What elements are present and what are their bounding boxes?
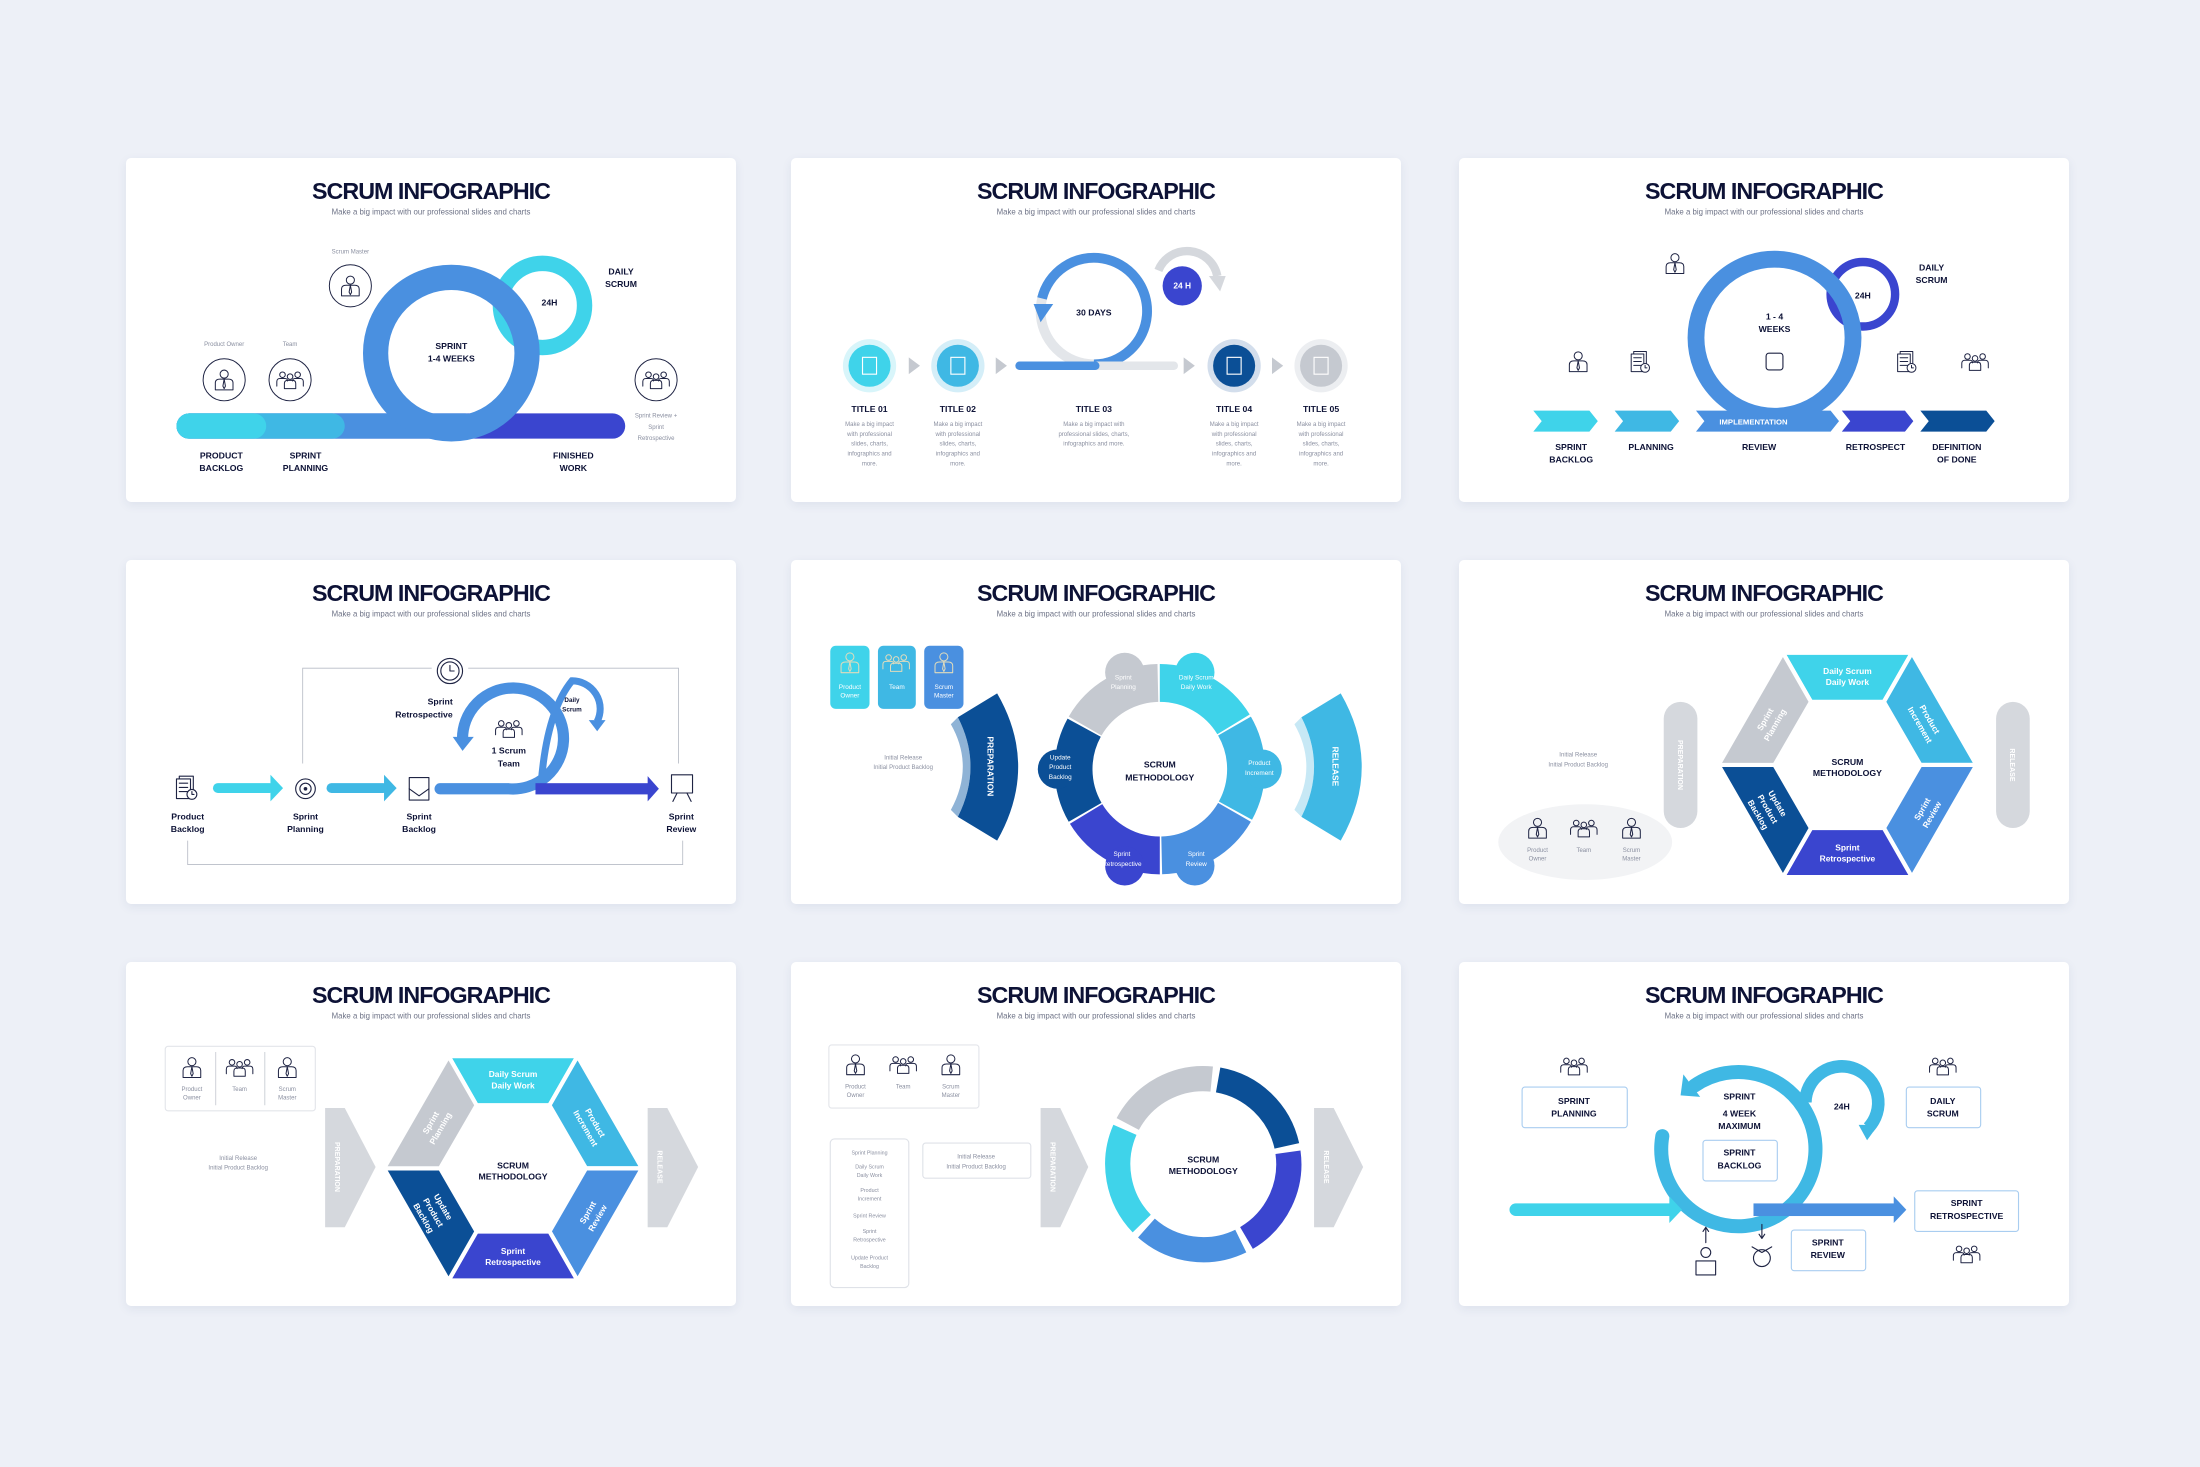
step texts: more. xyxy=(1313,461,1329,467)
30 days loop: 30 DAYS xyxy=(1076,307,1112,317)
icon: scrum master: Scrum Master xyxy=(332,250,369,256)
step icons xyxy=(176,775,693,801)
title: SCRUM INFOGRAPHIC xyxy=(1645,580,1884,606)
step texts: TITLE 04 xyxy=(1216,404,1252,414)
title: SCRUM INFOGRAPHIC xyxy=(312,178,551,204)
roles box: Owner xyxy=(847,1093,864,1099)
sprint ring: 1 - 4 xyxy=(1766,311,1783,321)
hex labels: Daily Scrum xyxy=(1823,666,1872,676)
bottom labels: WORK xyxy=(560,463,588,473)
cyan arrows xyxy=(213,775,397,801)
loop: Daily xyxy=(564,697,580,704)
title: SCRUM INFOGRAPHIC xyxy=(977,982,1216,1008)
title: SCRUM INFOGRAPHIC xyxy=(977,178,1216,204)
roles ellipse: Owner xyxy=(1529,856,1546,862)
bottom labels: FINISHED xyxy=(553,450,594,460)
list box: Sprint Review xyxy=(853,1213,886,1219)
role boxes: Team xyxy=(889,684,905,691)
chevrons: IMPLEMENTATION xyxy=(1719,418,1788,427)
initial release: Initial Release xyxy=(219,1156,258,1162)
sprint loop xyxy=(1661,1066,1878,1226)
title xyxy=(1645,982,1884,1020)
hex labels: Retrospective xyxy=(485,1257,541,1267)
step labels: Backlog xyxy=(402,824,436,834)
title: SCRUM INFOGRAPHIC xyxy=(312,982,551,1008)
icon: clock xyxy=(437,658,463,684)
hex labels: METHODOLOGY xyxy=(479,1172,548,1182)
title: Make a big impact with our professional slides and charts xyxy=(1665,609,1863,618)
preparation chevron: PREPARATION xyxy=(333,1142,340,1192)
release chevron: RELEASE xyxy=(1322,1150,1329,1184)
step labels: Sprint xyxy=(407,812,432,822)
initial release text: Initial Product Backlog xyxy=(873,765,933,771)
hex labels: Retrospective xyxy=(1820,854,1876,864)
title: Make a big impact with our professional slides and charts xyxy=(332,1011,530,1020)
wheel: Sprint xyxy=(1115,674,1132,681)
cycle ring: METHODOLOGY xyxy=(1169,1166,1238,1176)
box labels: SPRINT xyxy=(1724,1148,1756,1158)
title: Make a big impact with our professional slides and charts xyxy=(1665,207,1863,216)
title: SCRUM INFOGRAPHIC xyxy=(1645,178,1884,204)
initial release xyxy=(208,1156,268,1172)
title: SCRUM INFOGRAPHIC xyxy=(977,580,1216,606)
process bar xyxy=(176,413,625,439)
wheel: Backlog xyxy=(1049,774,1072,781)
team icons xyxy=(1561,1058,1980,1263)
boxes xyxy=(1522,1087,2019,1271)
list box: Daily Work xyxy=(857,1173,883,1179)
title xyxy=(312,178,551,216)
release chevron xyxy=(648,1108,698,1227)
initial release text xyxy=(1548,753,1608,768)
flow arrows xyxy=(1509,1196,1906,1223)
wheel xyxy=(1038,651,1282,887)
initial release text: Initial Release xyxy=(1559,753,1598,759)
panel: card 5 methodology wheel xyxy=(791,560,1401,904)
step texts: Make a big impact xyxy=(933,422,983,428)
roles box: Scrum xyxy=(942,1084,960,1090)
box labels: SPRINT xyxy=(1951,1198,1983,1208)
step texts: Make a big impact xyxy=(1210,422,1259,428)
wheel: Daily Work xyxy=(1181,684,1213,691)
team text: Retrospective xyxy=(395,709,453,719)
wheel: Daily Scrum xyxy=(1179,674,1214,681)
bottom labels xyxy=(199,450,594,473)
role boxes: Owner xyxy=(840,693,860,700)
release chevron: RELEASE xyxy=(655,1150,662,1184)
title xyxy=(312,982,551,1020)
labels: BACKLOG xyxy=(1549,455,1593,465)
title xyxy=(977,982,1216,1020)
preparation chevron: PREPARATION xyxy=(1048,1142,1055,1192)
icons xyxy=(1569,254,1988,372)
panel: card 1 sprint loop xyxy=(126,158,736,502)
icon: team xyxy=(269,342,311,401)
sprint ring: WEEKS xyxy=(1759,324,1791,334)
step labels: Sprint xyxy=(293,812,318,822)
bottom labels: BACKLOG xyxy=(199,463,244,473)
step texts: more. xyxy=(862,461,878,467)
icon: product owner: Product Owner xyxy=(204,342,244,348)
roles ellipse: Team xyxy=(1576,848,1591,854)
step texts: infographics and xyxy=(936,452,980,458)
hex labels: Sprint xyxy=(1912,796,1933,822)
icon: team: Team xyxy=(283,342,297,348)
24h cycle: 24 H xyxy=(1173,281,1191,291)
role boxes: Scrum xyxy=(935,684,953,691)
hex labels: Sprint xyxy=(1835,842,1860,852)
step texts: infographics and xyxy=(847,452,892,458)
icon: review team: Sprint xyxy=(648,425,664,431)
initial release box: Initial Product Backlog xyxy=(946,1164,1006,1170)
step texts: infographics and xyxy=(1212,452,1256,458)
cycle ring: SCRUM xyxy=(1187,1155,1219,1165)
hex labels: Product xyxy=(1756,793,1780,825)
role boxes xyxy=(830,646,963,709)
hex labels: Sprint xyxy=(577,1199,598,1225)
preparation arc: PREPARATION xyxy=(985,736,995,796)
step texts: slides, charts, xyxy=(939,442,977,448)
sprint ring xyxy=(1696,259,1853,416)
daily ring: DAILY xyxy=(1919,262,1944,272)
box labels: SPRINT xyxy=(1812,1237,1844,1247)
list box xyxy=(830,1139,909,1288)
initial release: Initial Product Backlog xyxy=(208,1166,268,1172)
hex labels: Sprint xyxy=(501,1246,525,1256)
wheel: METHODOLOGY xyxy=(1125,772,1195,782)
icon: scrum master xyxy=(329,250,371,307)
wheel: Increment xyxy=(1245,770,1274,777)
step labels: Backlog xyxy=(171,824,205,834)
step labels: Product xyxy=(171,812,204,822)
roles ellipse xyxy=(1498,804,1672,880)
team text: Sprint xyxy=(428,697,453,707)
daily scrum ring: DAILY xyxy=(608,267,634,277)
step texts: Make a big impact xyxy=(845,422,894,428)
arrows xyxy=(909,357,1283,374)
labels: PLANNING xyxy=(1628,442,1674,452)
hex labels: Update xyxy=(432,1192,455,1222)
release arc xyxy=(1294,693,1362,841)
preparation chevron xyxy=(1041,1108,1088,1227)
step texts: TITLE 03 xyxy=(1076,404,1112,414)
title: SCRUM INFOGRAPHIC xyxy=(1645,982,1884,1008)
step texts: slides, charts, xyxy=(1216,442,1253,448)
bottom labels: PRODUCT xyxy=(200,450,244,460)
wheel: Planning xyxy=(1111,684,1136,691)
list box: Product xyxy=(860,1188,879,1194)
hex labels: Daily Scrum xyxy=(489,1069,537,1079)
step texts: more. xyxy=(950,461,966,467)
hex labels xyxy=(411,1069,610,1267)
roles box: Owner xyxy=(183,1096,201,1102)
roles box: Product xyxy=(182,1087,203,1093)
box labels: SCRUM xyxy=(1927,1108,1959,1118)
panel: card 3 chevrons xyxy=(1459,158,2069,502)
roles ellipse: Product xyxy=(1527,848,1548,854)
step labels: Planning xyxy=(287,824,324,834)
bottom labels: PLANNING xyxy=(283,463,328,473)
wheel: Sprint xyxy=(1188,851,1205,858)
prep and release pills: RELEASE xyxy=(2008,748,2015,782)
initial release box xyxy=(923,1143,1031,1178)
step texts: TITLE 01 xyxy=(851,404,888,414)
hex labels: Increment xyxy=(1906,705,1935,745)
step circles xyxy=(843,339,1348,392)
sprint ring: SPRINT xyxy=(435,341,468,351)
list box: Sprint Planning xyxy=(852,1150,888,1156)
panel: card 8 cycle xyxy=(791,962,1401,1306)
team text xyxy=(395,697,526,768)
wheel: Review xyxy=(1186,861,1207,868)
panel: card 7 hexagon chevrons xyxy=(126,962,736,1306)
list box: Sprint xyxy=(863,1229,877,1235)
labels: REVIEW xyxy=(1742,442,1777,452)
sprint ring: 1-4 WEEKS xyxy=(428,354,475,364)
hex labels: Product xyxy=(421,1196,446,1229)
wheel: Retrospective xyxy=(1102,861,1142,868)
title: SCRUM INFOGRAPHIC xyxy=(312,580,551,606)
wheel: Product xyxy=(1248,760,1271,767)
step labels: Review xyxy=(666,824,697,834)
title xyxy=(1645,580,1884,618)
roles box: Team xyxy=(896,1084,911,1090)
step texts: TITLE 02 xyxy=(940,404,976,414)
icon: review team: Sprint Review + xyxy=(635,414,678,420)
hex labels: Sprint xyxy=(1755,706,1776,732)
daily ring: 24H xyxy=(1855,290,1871,300)
preparation arc xyxy=(951,693,1018,841)
title xyxy=(1645,178,1884,216)
timeline line xyxy=(1015,362,1178,370)
hex labels: Backlog xyxy=(411,1201,436,1235)
list box: Increment xyxy=(858,1197,882,1203)
initial release box: Initial Release xyxy=(957,1155,996,1161)
team text: Team xyxy=(498,758,520,768)
cycle ring xyxy=(1082,1043,1324,1285)
title: Make a big impact with our professional slides and charts xyxy=(997,1011,1195,1020)
release chevron xyxy=(1314,1108,1363,1227)
hex labels: Daily Work xyxy=(1826,677,1869,687)
list box: Backlog xyxy=(860,1264,879,1270)
step texts: infographics and xyxy=(1299,452,1343,458)
loop xyxy=(440,681,606,789)
sprint loop: 4 WEEK xyxy=(1723,1108,1757,1118)
step texts: with professional xyxy=(846,432,892,438)
box labels: SPRINT xyxy=(1558,1096,1591,1106)
bottom icons xyxy=(1696,1224,1772,1275)
step texts: infographics and more. xyxy=(1063,442,1125,448)
roles box xyxy=(829,1045,979,1108)
box labels: DAILY xyxy=(1930,1096,1956,1106)
step texts: Make a big impact with xyxy=(1063,422,1124,428)
initial release text: Initial Product Backlog xyxy=(1548,762,1608,768)
box labels: REVIEW xyxy=(1811,1250,1846,1260)
step texts: slides, charts, xyxy=(1303,442,1340,448)
step texts: with professional xyxy=(934,432,980,438)
prep and release pills: PREPARATION xyxy=(1676,740,1683,790)
hex labels: Increment xyxy=(571,1108,600,1148)
labels: OF DONE xyxy=(1937,455,1977,465)
30 days loop xyxy=(1034,258,1147,364)
wheel: SCRUM xyxy=(1144,760,1176,770)
list box: Daily Scrum xyxy=(855,1164,884,1170)
panel: card 4 flow xyxy=(126,560,736,904)
wheel: Update xyxy=(1050,754,1071,761)
chevrons xyxy=(1533,411,1995,432)
icon: product owner xyxy=(203,342,245,401)
hexagon xyxy=(1718,653,1976,877)
title: Make a big impact with our professional slides and charts xyxy=(332,609,530,618)
daily scrum ring xyxy=(500,263,637,348)
sprint loop: SPRINT xyxy=(1724,1092,1756,1102)
roles box: Scrum xyxy=(279,1087,296,1093)
roles box: Master xyxy=(278,1096,296,1102)
step labels xyxy=(171,812,697,834)
sprint ring xyxy=(376,277,527,429)
roles box xyxy=(165,1046,315,1111)
panel: card 9 sprint loop boxes xyxy=(1459,962,2069,1306)
hex labels: Review xyxy=(586,1203,609,1233)
initial release text: Initial Release xyxy=(884,755,923,761)
title: Make a big impact with our professional slides and charts xyxy=(997,207,1195,216)
hexagon xyxy=(384,1056,642,1281)
panel: card 2 timeline xyxy=(791,158,1401,502)
box labels: PLANNING xyxy=(1551,1108,1597,1118)
sprint loop: 24H xyxy=(1834,1101,1850,1111)
hex labels: Daily Work xyxy=(491,1080,535,1090)
wheel: Product xyxy=(1049,764,1072,771)
title: Make a big impact with our professional slides and charts xyxy=(1665,1011,1863,1020)
prep and release pills xyxy=(1664,702,2030,828)
daily scrum ring: SCRUM xyxy=(605,279,637,289)
box labels xyxy=(1551,1096,2004,1260)
team text: 1 Scrum xyxy=(492,746,526,756)
daily ring xyxy=(1831,262,1948,326)
title xyxy=(977,178,1216,216)
step texts xyxy=(845,404,1346,467)
initial release text xyxy=(873,755,933,771)
role boxes: Master xyxy=(934,693,955,700)
icon: review team xyxy=(635,359,678,442)
sprint loop: MAXIMUM xyxy=(1718,1121,1761,1131)
hex labels: Planning xyxy=(427,1110,454,1146)
hex labels: Product xyxy=(1918,703,1942,736)
list box: Retrospective xyxy=(853,1237,886,1243)
step texts: TITLE 05 xyxy=(1303,404,1339,414)
icon: review team: Retrospective xyxy=(638,436,675,442)
roles ellipse: Scrum xyxy=(1623,848,1640,854)
box labels: BACKLOG xyxy=(1717,1160,1762,1170)
role boxes: Product xyxy=(839,684,861,691)
step texts: professional slides, charts, xyxy=(1058,432,1130,438)
hex labels: Backlog xyxy=(1746,798,1771,831)
roles box: Team xyxy=(232,1087,247,1093)
indigo arrow xyxy=(535,776,659,801)
hex labels: Review xyxy=(1920,799,1944,830)
preparation chevron xyxy=(325,1108,376,1227)
step texts: with professional xyxy=(1211,432,1257,438)
step labels: Sprint xyxy=(669,812,694,822)
box labels: RETROSPECTIVE xyxy=(1930,1211,2004,1221)
daily scrum ring: 24H xyxy=(542,297,557,307)
hex labels: Sprint xyxy=(420,1110,441,1136)
step texts: slides, charts, xyxy=(851,442,888,448)
list box: Update Product xyxy=(851,1256,889,1262)
daily ring: SCRUM xyxy=(1916,275,1948,285)
title xyxy=(977,580,1216,618)
frame xyxy=(188,668,683,865)
labels: SPRINT xyxy=(1555,442,1588,452)
hex labels: Product xyxy=(583,1106,608,1139)
title xyxy=(312,580,551,618)
title: Make a big impact with our professional slides and charts xyxy=(332,207,530,216)
roles box: Master xyxy=(942,1093,960,1099)
24h cycle xyxy=(1158,251,1226,305)
step texts: Make a big impact xyxy=(1297,422,1346,428)
labels: DEFINITION xyxy=(1932,442,1981,452)
roles box: Product xyxy=(845,1084,866,1090)
loop: Scrum xyxy=(562,707,582,714)
hex labels: Planning xyxy=(1762,707,1788,743)
hex labels: METHODOLOGY xyxy=(1813,768,1882,778)
hex labels: Update xyxy=(1766,789,1789,819)
panel: card 6 hexagon xyxy=(1459,560,2069,904)
wheel: Sprint xyxy=(1114,851,1131,858)
step texts: with professional xyxy=(1298,432,1343,438)
hex labels xyxy=(1746,666,1944,864)
labels xyxy=(1549,442,1981,465)
hex labels: SCRUM xyxy=(497,1160,529,1170)
labels: RETROSPECT xyxy=(1846,442,1906,452)
bottom labels: SPRINT xyxy=(290,450,322,460)
release arc: RELEASE xyxy=(1330,746,1340,787)
hex labels: SCRUM xyxy=(1832,757,1863,767)
roles ellipse: Master xyxy=(1622,856,1641,862)
title: Make a big impact with our professional slides and charts xyxy=(997,609,1195,618)
step texts: more. xyxy=(1226,461,1242,467)
